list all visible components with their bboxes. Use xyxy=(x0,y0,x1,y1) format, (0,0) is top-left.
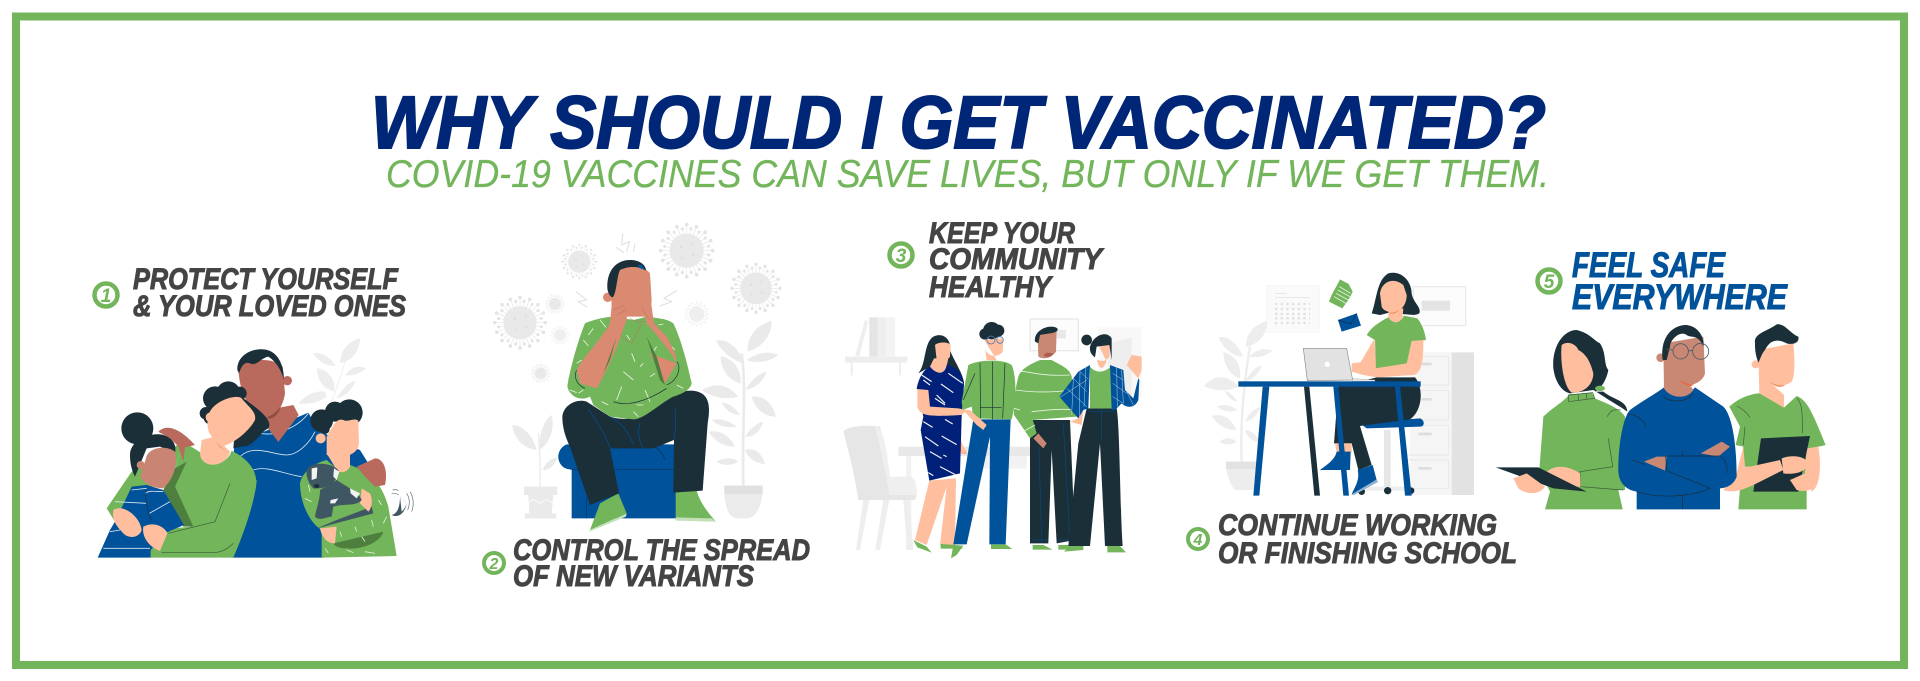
girl xyxy=(98,412,184,558)
heading 1: PROTECT YOURSELF xyxy=(133,263,399,296)
heading 2: OF NEW VARIANTS xyxy=(513,560,754,593)
number badge 5: 5 xyxy=(1544,272,1555,293)
person 2: man with glasses xyxy=(951,322,1015,558)
heading 3: KEEP YOUR xyxy=(929,217,1075,250)
number badge 5 xyxy=(1538,270,1560,293)
heading 2: CONTROL THE SPREAD xyxy=(513,534,810,567)
sweater xyxy=(567,317,692,419)
mother's arm and hands xyxy=(113,480,257,552)
number badge 4 xyxy=(1188,529,1208,549)
illustration: woman at a laptop xyxy=(1204,273,1474,496)
title: WHY SHOULD I GET VACCINATED? xyxy=(371,81,1546,164)
stool xyxy=(1358,418,1424,495)
grey office background xyxy=(843,317,1142,550)
person 1: woman in navy dress xyxy=(913,335,967,553)
heading 3: COMMUNITY xyxy=(929,243,1105,276)
man with clipboard, behind xyxy=(1723,324,1826,509)
illustration: family embrace xyxy=(98,338,413,558)
illustration: worried man among viruses xyxy=(493,223,782,532)
heading 5: EVERYWHERE xyxy=(1572,278,1788,317)
subtitle: COVID-19 VACCINES CAN SAVE LIVES, BUT ONLY IF WE GET THEM. xyxy=(386,153,1549,196)
illustration: four people standing together xyxy=(843,317,1142,558)
bench xyxy=(558,444,677,518)
desk xyxy=(1238,381,1421,496)
heading 4: CONTINUE WORKING xyxy=(1218,509,1497,542)
number badge 1 xyxy=(94,284,118,307)
background plant xyxy=(299,338,366,405)
heading 3: HEALTHY xyxy=(929,271,1054,304)
number badge 2: 2 xyxy=(489,556,499,573)
woman with tablet xyxy=(1496,330,1627,509)
laptop xyxy=(1303,348,1375,381)
panel 3: keep your community healthy xyxy=(843,217,1142,558)
number badge 2 xyxy=(484,553,504,573)
person 4: woman in plaid jacket xyxy=(1059,334,1142,552)
left grey plant xyxy=(512,415,557,518)
stress bolts xyxy=(576,233,677,307)
number badge 1: 1 xyxy=(101,286,111,307)
panel 2: control the spread xyxy=(484,223,810,593)
grey viruses xyxy=(493,223,782,383)
grey office background xyxy=(1204,285,1474,495)
person 3: man in striped shirt xyxy=(1014,327,1077,550)
heading 4: OR FINISHING SCHOOL xyxy=(1218,537,1517,570)
father's hand on girl xyxy=(158,428,195,462)
mother xyxy=(107,381,269,558)
panel 4: continue working or school xyxy=(1188,273,1517,570)
man with glasses and crossed arms xyxy=(1618,325,1737,509)
boy with dog xyxy=(300,399,413,558)
shoes xyxy=(589,491,716,532)
panel 1: protect yourself xyxy=(94,263,413,558)
panel 5: feel safe everywhere xyxy=(1496,246,1826,509)
icon: flying document xyxy=(1329,279,1353,308)
heading 1: & YOUR LOVED ONES xyxy=(133,290,406,323)
trousers xyxy=(562,391,709,505)
heading 5: FEEL SAFE xyxy=(1572,246,1726,285)
number badge 3 xyxy=(890,244,912,267)
illustration: three confident people xyxy=(1496,324,1826,509)
father xyxy=(232,349,368,558)
woman xyxy=(1320,273,1426,495)
icon: envelope xyxy=(1338,313,1361,332)
right grey plant xyxy=(702,321,778,518)
head and hands xyxy=(577,260,677,388)
number badge 3: 3 xyxy=(896,246,907,267)
number badge 4: 4 xyxy=(1193,532,1203,549)
